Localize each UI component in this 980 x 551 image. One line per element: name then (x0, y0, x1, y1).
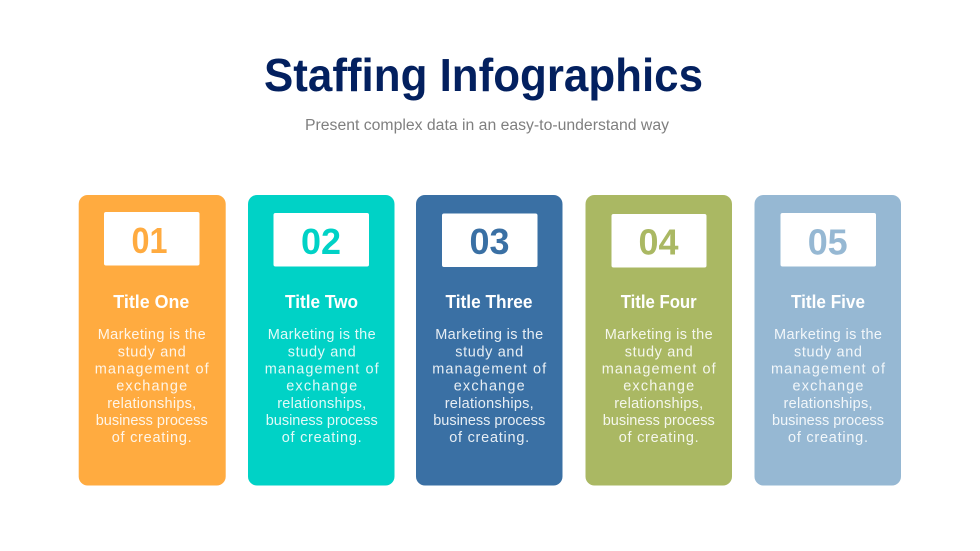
card one body text: management of (95, 362, 210, 378)
card three body text: management of (432, 362, 547, 378)
card two body text: of creating. (282, 430, 362, 446)
card four heading: Title Four (621, 292, 697, 312)
card three body text (432, 327, 547, 446)
card two body text: study and (288, 344, 356, 360)
card five heading: Title Five (791, 292, 865, 312)
card one background (79, 195, 226, 486)
card one body text: exchange (116, 378, 187, 394)
card one body text: of creating. (112, 430, 192, 446)
card two body text: Marketing is the (268, 327, 376, 343)
card five number box (780, 213, 876, 266)
card five body text: relationships, (784, 396, 872, 412)
card one heading: Title One (113, 292, 189, 312)
card five body text: management of (771, 362, 886, 378)
card one number box (104, 212, 200, 266)
card two body text: management of (265, 362, 380, 378)
card three body text: relationships, (445, 396, 534, 412)
card four body text: Marketing is the (605, 327, 713, 343)
card one body text (95, 327, 210, 446)
card two body text: business process (266, 413, 378, 429)
card five background (754, 195, 901, 486)
card three body text: business process (433, 413, 545, 429)
card five body text: business process (772, 413, 884, 429)
card five body text: study and (794, 344, 862, 360)
card three number box: 03 (470, 221, 510, 262)
panel: card two (248, 195, 394, 486)
title: Staffing Infographics (264, 49, 703, 101)
panel: card one (79, 195, 226, 486)
panel: card three (416, 195, 562, 486)
card five body text (771, 327, 886, 446)
card five body text: Marketing is the (774, 327, 882, 343)
card one body text: relationships, (107, 396, 196, 412)
card three background (416, 195, 562, 486)
card two background (248, 195, 394, 486)
card one body text: business process (96, 413, 208, 429)
card three heading: Title Three (446, 292, 532, 312)
subtitle: Present complex data in an easy-to-understand way (305, 117, 669, 134)
card four body text: exchange (623, 378, 694, 394)
card one body text: study and (118, 344, 186, 360)
panel: card four (586, 195, 732, 486)
card four body text (602, 327, 717, 446)
card five body text: exchange (792, 378, 864, 394)
card four background (586, 195, 732, 486)
card three body text: study and (455, 344, 523, 360)
card two heading: Title Two (285, 292, 358, 312)
card three body text: of creating. (449, 430, 529, 446)
card one number box: 01 (132, 220, 168, 261)
card four number box: 04 (638, 222, 678, 262)
card two number box (274, 213, 369, 266)
card two number box: 02 (301, 221, 341, 262)
card four body text: study and (625, 344, 693, 360)
card four body text: of creating. (619, 430, 699, 446)
card four body text: relationships, (614, 396, 703, 412)
card five body text: of creating. (788, 430, 868, 446)
card two body text: relationships, (277, 396, 366, 412)
card three body text: Marketing is the (435, 327, 543, 343)
card two body text: exchange (286, 378, 357, 394)
card two body text (265, 327, 380, 446)
panel: card five (754, 195, 901, 486)
card four number box (612, 214, 706, 268)
card five number box: 05 (808, 222, 848, 262)
card three number box (442, 214, 538, 267)
card three body text: exchange (454, 378, 525, 394)
card four body text: business process (603, 413, 715, 429)
card one body text: Marketing is the (98, 327, 206, 343)
card four body text: management of (602, 362, 717, 378)
